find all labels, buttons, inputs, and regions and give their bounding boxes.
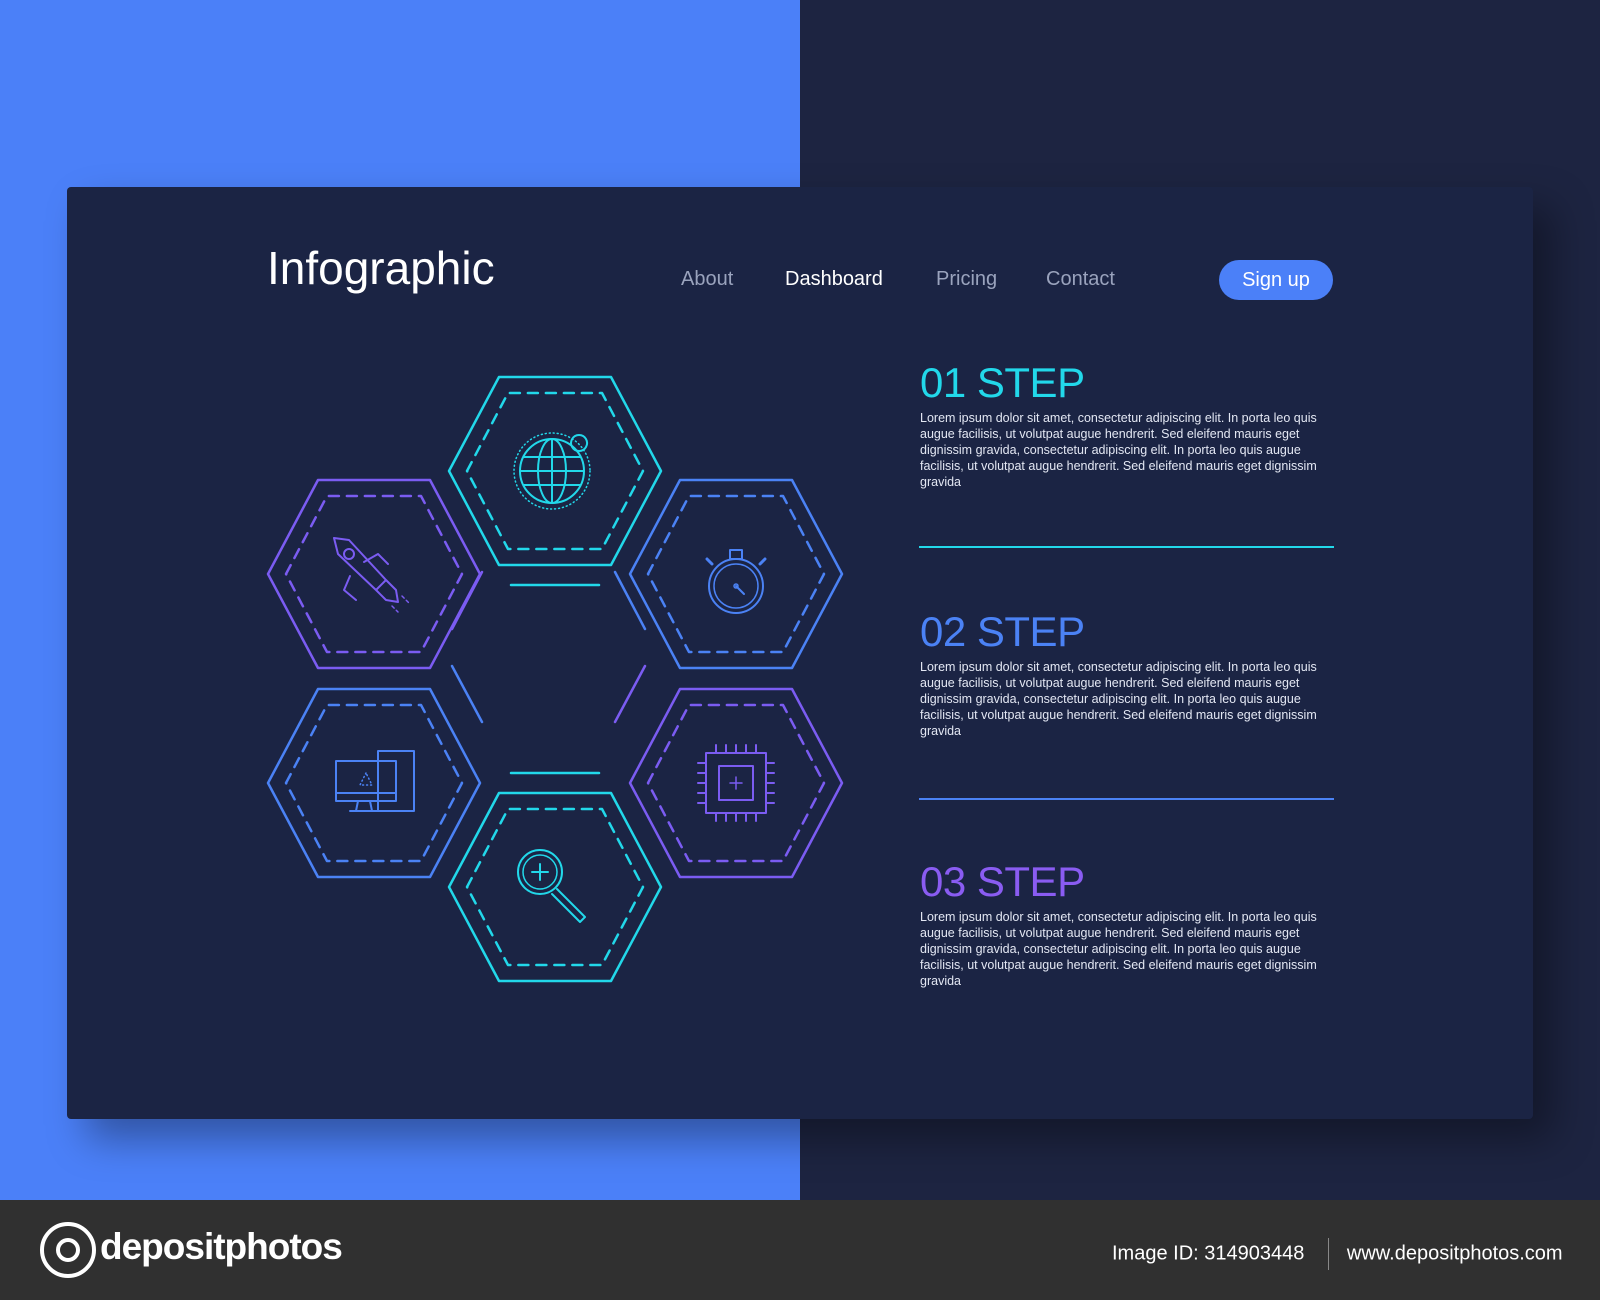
nav menu [681, 268, 1115, 290]
nav menu: Pricing [936, 268, 997, 290]
footer info: Image ID: 314903448 www.depositphotos.com [1112, 1242, 1563, 1264]
blue background panel [0, 0, 800, 1200]
dark background right [800, 0, 1600, 1200]
step 1: Lorem ipsum dolor sit amet, consectetur adipiscing elit. In porta leo quis augue facilisis, ut volutpat augue hendrerit. Sed eleifend mauris eget dignissim gravida, consectetur adipiscing elit. In porta leo quis augue facilisis, ut volutpat augue hendrerit. Sed eleifend mauris eget dignissim gravida [920, 411, 1317, 489]
main card [67, 187, 1533, 1119]
step 2 [920, 608, 1317, 738]
sign up button [1219, 260, 1333, 300]
hex: chip [630, 689, 842, 877]
title: Infographic [267, 242, 495, 294]
nav menu: Contact [1046, 268, 1115, 290]
step 2: Lorem ipsum dolor sit amet, consectetur adipiscing elit. In porta leo quis augue facilisis, ut volutpat augue hendrerit. Sed eleifend mauris eget dignissim gravida, consectetur adipiscing elit. In porta leo quis augue facilisis, ut volutpat augue hendrerit. Sed eleifend mauris eget dignissim gravida [920, 660, 1317, 738]
nav menu: Dashboard [785, 268, 883, 290]
hex: stopwatch [630, 480, 842, 668]
step 1 [920, 359, 1317, 489]
hex: magnifier [449, 793, 661, 981]
hex: rocket [268, 480, 480, 668]
sign up button: Sign up [1242, 269, 1310, 291]
footer bar [0, 1200, 1600, 1300]
hex: computer [268, 689, 480, 877]
step 2: 02 STEP [920, 608, 1085, 655]
step 3: 03 STEP [920, 858, 1085, 905]
footer logo [40, 1222, 342, 1278]
hex: globe [449, 377, 661, 565]
nav menu: About [681, 268, 733, 290]
connectors [452, 572, 645, 773]
footer logo: depositphotos [100, 1226, 342, 1267]
step 3 [920, 858, 1317, 988]
step 1: 01 STEP [920, 359, 1085, 406]
step 3: Lorem ipsum dolor sit amet, consectetur adipiscing elit. In porta leo quis augue facilisis, ut volutpat augue hendrerit. Sed eleifend mauris eget dignissim gravida, consectetur adipiscing elit. In porta leo quis augue facilisis, ut volutpat augue hendrerit. Sed eleifend mauris eget dignissim gravida [920, 910, 1317, 988]
